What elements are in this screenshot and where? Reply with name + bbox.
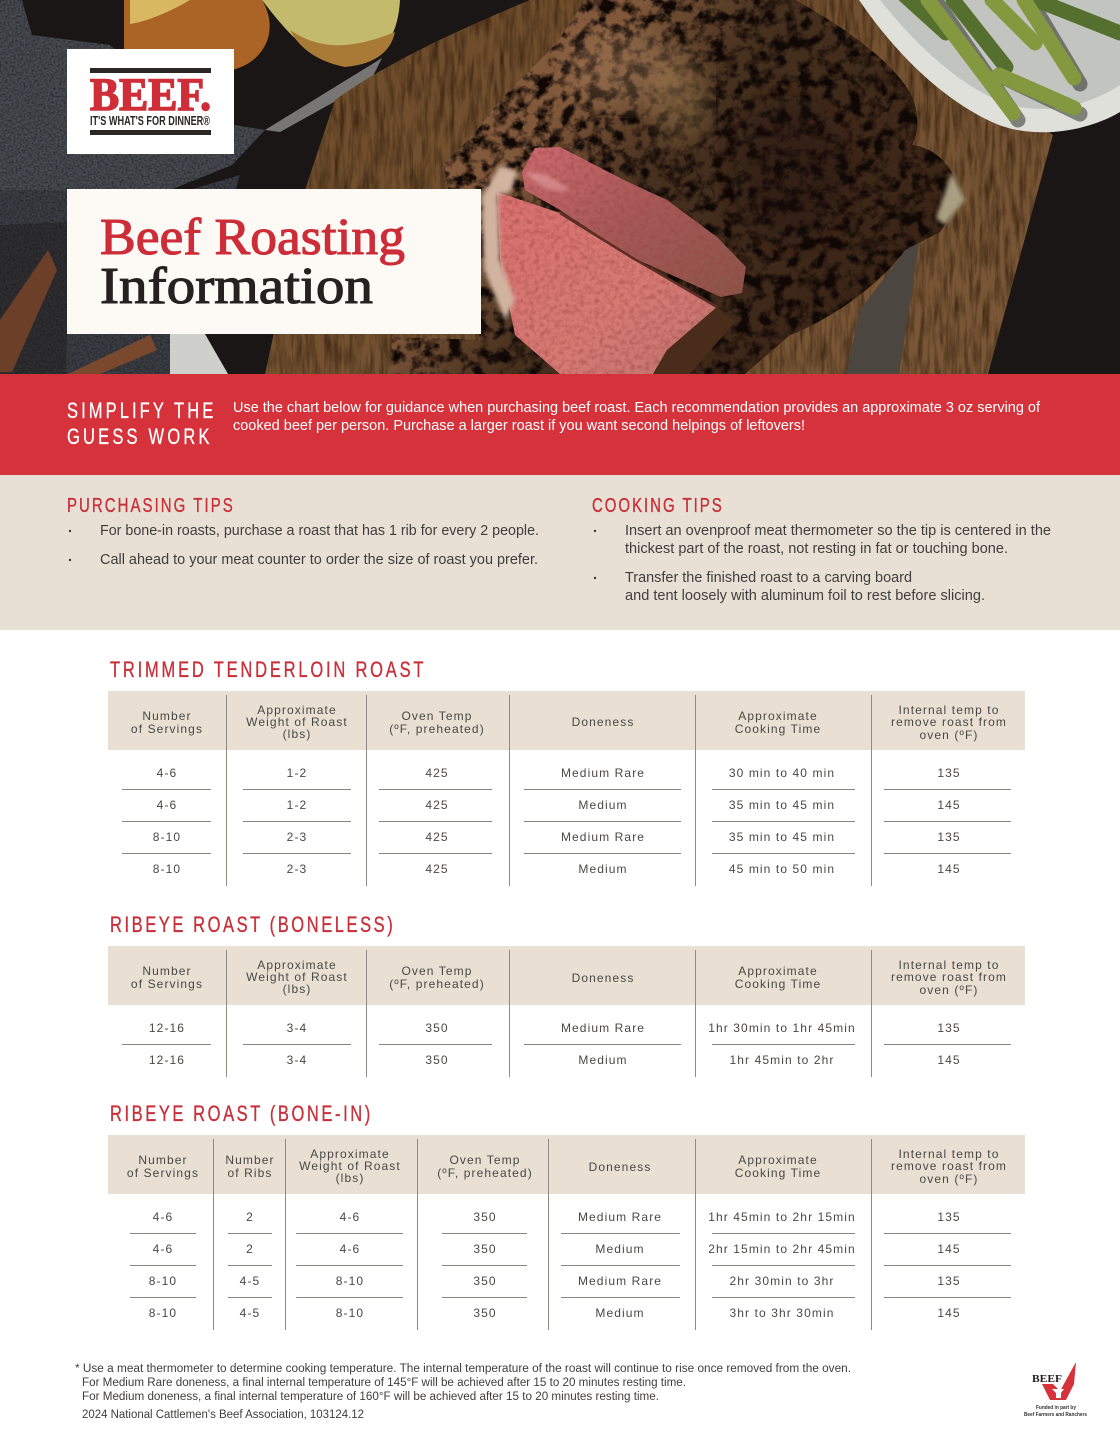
table: ribeye roast bone-in: Internal temp to [899, 1147, 999, 1161]
table: ribeye roast boneless: Medium Rare [561, 1021, 645, 1035]
banner heading: GUESS WORK [67, 425, 210, 450]
table: ribeye roast boneless: Internal temp to [899, 958, 999, 972]
table: ribeye roast bone-in: 2hr 30min to 3hr [730, 1274, 834, 1288]
table: trimmed tenderloin roast: 30 min to 40 min [729, 766, 835, 780]
table: ribeye roast bone-in: 4-5 [240, 1274, 260, 1288]
table: ribeye roast boneless: 3-4 [287, 1053, 307, 1067]
funding logo: Beef Farmers and Ranchers [1024, 1412, 1087, 1418]
table: trimmed tenderloin roast: 145 [937, 798, 961, 812]
sliced meat [482, 147, 746, 374]
banner heading [67, 399, 213, 450]
heading: trimmed tenderloin roast: TRIMMED TENDERLOIN ROAST [110, 658, 424, 683]
table: ribeye roast bone-in: 350 [473, 1210, 497, 1224]
table: ribeye roast bone-in: 2hr 15min to 2hr 45min [708, 1242, 856, 1256]
table: ribeye roast bone-in: Doneness [589, 1160, 651, 1174]
funding logo [1024, 1362, 1087, 1418]
table: trimmed tenderloin roast: oven (ºF) [920, 728, 978, 742]
table: ribeye roast boneless: 1hr 45min to 2hr [730, 1053, 834, 1067]
table: ribeye roast bone-in: Medium Rare [578, 1210, 662, 1224]
table: ribeye roast bone-in: Approximate [738, 1153, 818, 1167]
logo wordmark: BEEF. [90, 69, 211, 121]
table: trimmed tenderloin roast: of Servings [131, 722, 203, 736]
table: trimmed tenderloin roast: 4-6 [157, 766, 177, 780]
purchasing tips: PURCHASING TIPS [67, 494, 233, 517]
table: ribeye roast bone-in: 350 [473, 1242, 497, 1256]
cooking tips: Transfer the finished roast to a carving board [625, 570, 912, 586]
table: ribeye roast bone-in: 135 [937, 1210, 961, 1224]
tips panel [0, 475, 1120, 630]
table: ribeye roast boneless: Oven Temp [401, 964, 473, 978]
heading: ribeye roast bone-in: RIBEYE ROAST (BONE-IN) [110, 1102, 370, 1127]
table: ribeye roast bone-in: 8-10 [336, 1274, 364, 1288]
title card [67, 189, 481, 334]
white serving plate [859, 0, 1120, 132]
table: ribeye roast bone-in: 8-10 [149, 1306, 177, 1320]
table: ribeye roast boneless: 3-4 [287, 1021, 307, 1035]
title line 2: Information [100, 258, 373, 315]
table: trimmed tenderloin roast: (lbs) [283, 727, 311, 741]
table: ribeye roast bone-in: Medium [595, 1306, 645, 1320]
table: ribeye roast boneless: oven (ºF) [920, 983, 978, 997]
footnote: For Medium Rare doneness, a final internal temperature of 145°F will be achieved after 15 to 20 minutes resting time. [82, 1377, 686, 1389]
crust highlights [565, 30, 965, 245]
table: ribeye roast boneless: Approximate [738, 964, 818, 978]
table: ribeye roast boneless: 145 [937, 1053, 961, 1067]
table: ribeye roast bone-in: 3hr to 3hr 30min [730, 1306, 834, 1320]
table: ribeye roast boneless: 1hr 30min to 1hr 45min [708, 1021, 856, 1035]
table: trimmed tenderloin roast: (ºF, preheated) [389, 722, 485, 736]
table: ribeye roast boneless: Medium [578, 1053, 628, 1067]
table: ribeye roast bone-in: Weight of Roast [299, 1159, 401, 1173]
table: trimmed tenderloin roast: 425 [425, 798, 449, 812]
cooking tips: COOKING TIPS [592, 494, 722, 517]
hero photo: roast on carving board [0, 0, 1120, 374]
table: trimmed tenderloin roast: 8-10 [153, 830, 181, 844]
table: trimmed tenderloin roast [108, 691, 1025, 886]
purchasing tips [67, 494, 539, 568]
table: ribeye roast bone-in: of Ribs [227, 1166, 273, 1180]
table: ribeye roast bone-in [108, 1135, 1025, 1330]
dish rim and handle details, lower left [0, 250, 228, 374]
table: trimmed tenderloin roast: 425 [425, 830, 449, 844]
footnote: For Medium doneness, a final internal temperature of 160°F will be achieved after 15 to 20 minutes resting time. [82, 1391, 659, 1403]
table: trimmed tenderloin roast: Doneness [572, 715, 634, 729]
cooking tips [592, 494, 1051, 604]
table: ribeye roast boneless: 12-16 [149, 1021, 185, 1035]
table: trimmed tenderloin roast: 35 min to 45 min [729, 830, 835, 844]
footnote: 2024 National Cattlemen's Beef Association, 103124.12 [82, 1409, 364, 1421]
table: trimmed tenderloin roast: 1-2 [287, 798, 307, 812]
table: ribeye roast boneless: 12-16 [149, 1053, 185, 1067]
table: trimmed tenderloin roast: 1-2 [287, 766, 307, 780]
banner heading: SIMPLIFY THE [67, 399, 213, 424]
table: ribeye roast boneless: remove roast from [891, 970, 1007, 984]
footnote [75, 1363, 851, 1421]
table: ribeye roast bone-in: 4-6 [340, 1210, 360, 1224]
heading: ribeye roast boneless: RIBEYE ROAST (BONELESS) [110, 913, 393, 938]
table: ribeye roast bone-in: 2 [246, 1210, 254, 1224]
table: ribeye roast bone-in: of Servings [127, 1166, 199, 1180]
table: trimmed tenderloin roast: Medium Rare [561, 766, 645, 780]
table: trimmed tenderloin roast: Oven Temp [401, 709, 473, 723]
table: ribeye roast bone-in: 4-6 [153, 1242, 173, 1256]
table: ribeye roast boneless: 350 [425, 1021, 449, 1035]
table: ribeye roast bone-in: Number [225, 1153, 275, 1167]
table: ribeye roast bone-in: Medium Rare [578, 1274, 662, 1288]
table: ribeye roast bone-in: 4-5 [240, 1306, 260, 1320]
funding logo: BEEF [1032, 1374, 1062, 1385]
table: trimmed tenderloin roast: 35 min to 45 min [729, 798, 835, 812]
table: ribeye roast bone-in: Cooking Time [735, 1166, 821, 1180]
table: ribeye roast boneless: Cooking Time [735, 977, 821, 991]
table: ribeye roast boneless: Number [142, 964, 192, 978]
table: trimmed tenderloin roast: 425 [425, 862, 449, 876]
table: ribeye roast bone-in: (lbs) [336, 1171, 364, 1185]
table: trimmed tenderloin roast: Number [142, 709, 192, 723]
asparagus [903, 0, 1120, 120]
table: ribeye roast bone-in: 145 [937, 1242, 961, 1256]
purchasing tips: Call ahead to your meat counter to order the size of roast you prefer. [100, 552, 538, 568]
table: ribeye roast boneless: (lbs) [283, 982, 311, 996]
cooking tips: and tent loosely with aluminum foil to rest before slicing. [625, 588, 985, 604]
table: trimmed tenderloin roast: 8-10 [153, 862, 181, 876]
carving knife blade [846, 243, 919, 374]
table: trimmed tenderloin roast: 45 min to 50 min [729, 862, 835, 876]
table: ribeye roast bone-in: 145 [937, 1306, 961, 1320]
table: ribeye roast boneless [108, 946, 1025, 1077]
wooden carving board [265, 0, 1053, 374]
table: ribeye roast bone-in: (ºF, preheated) [437, 1166, 533, 1180]
table: trimmed tenderloin roast: 4-6 [157, 798, 177, 812]
banner text: cooked beef per person. Purchase a larger roast if you want second helpings of leftovers! [233, 418, 805, 434]
table: ribeye roast bone-in: 1hr 45min to 2hr 15min [708, 1210, 856, 1224]
banner text: Use the chart below for guidance when purchasing beef roast. Each recommendation provides an approximate 3 oz serving of [233, 400, 1040, 416]
table: trimmed tenderloin roast: 2-3 [287, 830, 307, 844]
table: ribeye roast bone-in: Oven Temp [449, 1153, 521, 1167]
logo tagline: IT'S WHAT'S FOR DINNER® [90, 113, 210, 128]
table: trimmed tenderloin roast: Medium Rare [561, 830, 645, 844]
table: trimmed tenderloin roast: 135 [937, 766, 961, 780]
cooking tips: thickest part of the roast, not resting in fat or touching bone. [625, 541, 1008, 557]
table: trimmed tenderloin roast: Approximate [257, 703, 337, 717]
logo card [67, 49, 234, 154]
table: trimmed tenderloin roast: 135 [937, 830, 961, 844]
table: trimmed tenderloin roast: 425 [425, 766, 449, 780]
table: ribeye roast bone-in: oven (ºF) [920, 1172, 978, 1186]
table: trimmed tenderloin roast: Medium [578, 798, 628, 812]
table: ribeye roast boneless: (ºF, preheated) [389, 977, 485, 991]
table: ribeye roast bone-in: 350 [473, 1274, 497, 1288]
footnote: * Use a meat thermometer to determine cooking temperature. The internal temperature of the roast will continue to rise once removed from the oven. [75, 1363, 851, 1375]
table: trimmed tenderloin roast: remove roast from [891, 715, 1007, 729]
table: trimmed tenderloin roast: Medium [578, 862, 628, 876]
funding logo: Funded in part by [1036, 1405, 1077, 1411]
table: ribeye roast bone-in: 4-6 [153, 1210, 173, 1224]
table: trimmed tenderloin roast: 2-3 [287, 862, 307, 876]
table: ribeye roast bone-in: 2 [246, 1242, 254, 1256]
title line 1: Beef Roasting [100, 209, 405, 266]
table: trimmed tenderloin roast: Cooking Time [735, 722, 821, 736]
table: ribeye roast bone-in: 8-10 [149, 1274, 177, 1288]
yorkshire puddings [124, 0, 400, 70]
table: ribeye roast bone-in: Number [138, 1153, 188, 1167]
table: trimmed tenderloin roast: Approximate [738, 709, 818, 723]
table: ribeye roast boneless: Doneness [572, 971, 634, 985]
linen cloth [0, 0, 382, 374]
table: ribeye roast bone-in: Approximate [310, 1147, 390, 1161]
table: ribeye roast bone-in: 135 [937, 1274, 961, 1288]
table: ribeye roast boneless: 350 [425, 1053, 449, 1067]
table: ribeye roast bone-in: Medium [595, 1242, 645, 1256]
table: ribeye roast boneless: Approximate [257, 958, 337, 972]
table: ribeye roast boneless: of Servings [131, 977, 203, 991]
table: ribeye roast boneless: Weight of Roast [246, 970, 348, 984]
table: ribeye roast bone-in: 350 [473, 1306, 497, 1320]
table: ribeye roast boneless: 135 [937, 1021, 961, 1035]
red intro banner [0, 374, 1120, 475]
purchasing tips: For bone-in roasts, purchase a roast that has 1 rib for every 2 people. [100, 523, 539, 539]
roast crust [390, 0, 962, 374]
table: trimmed tenderloin roast: 145 [937, 862, 961, 876]
table: trimmed tenderloin roast: Internal temp to [899, 703, 999, 717]
table: ribeye roast bone-in: 8-10 [336, 1306, 364, 1320]
table: trimmed tenderloin roast: Weight of Roast [246, 715, 348, 729]
table: ribeye roast bone-in: 4-6 [340, 1242, 360, 1256]
banner text [233, 400, 1040, 434]
cooking tips: Insert an ovenproof meat thermometer so the tip is centered in the [625, 523, 1051, 539]
table: ribeye roast bone-in: remove roast from [891, 1159, 1007, 1173]
